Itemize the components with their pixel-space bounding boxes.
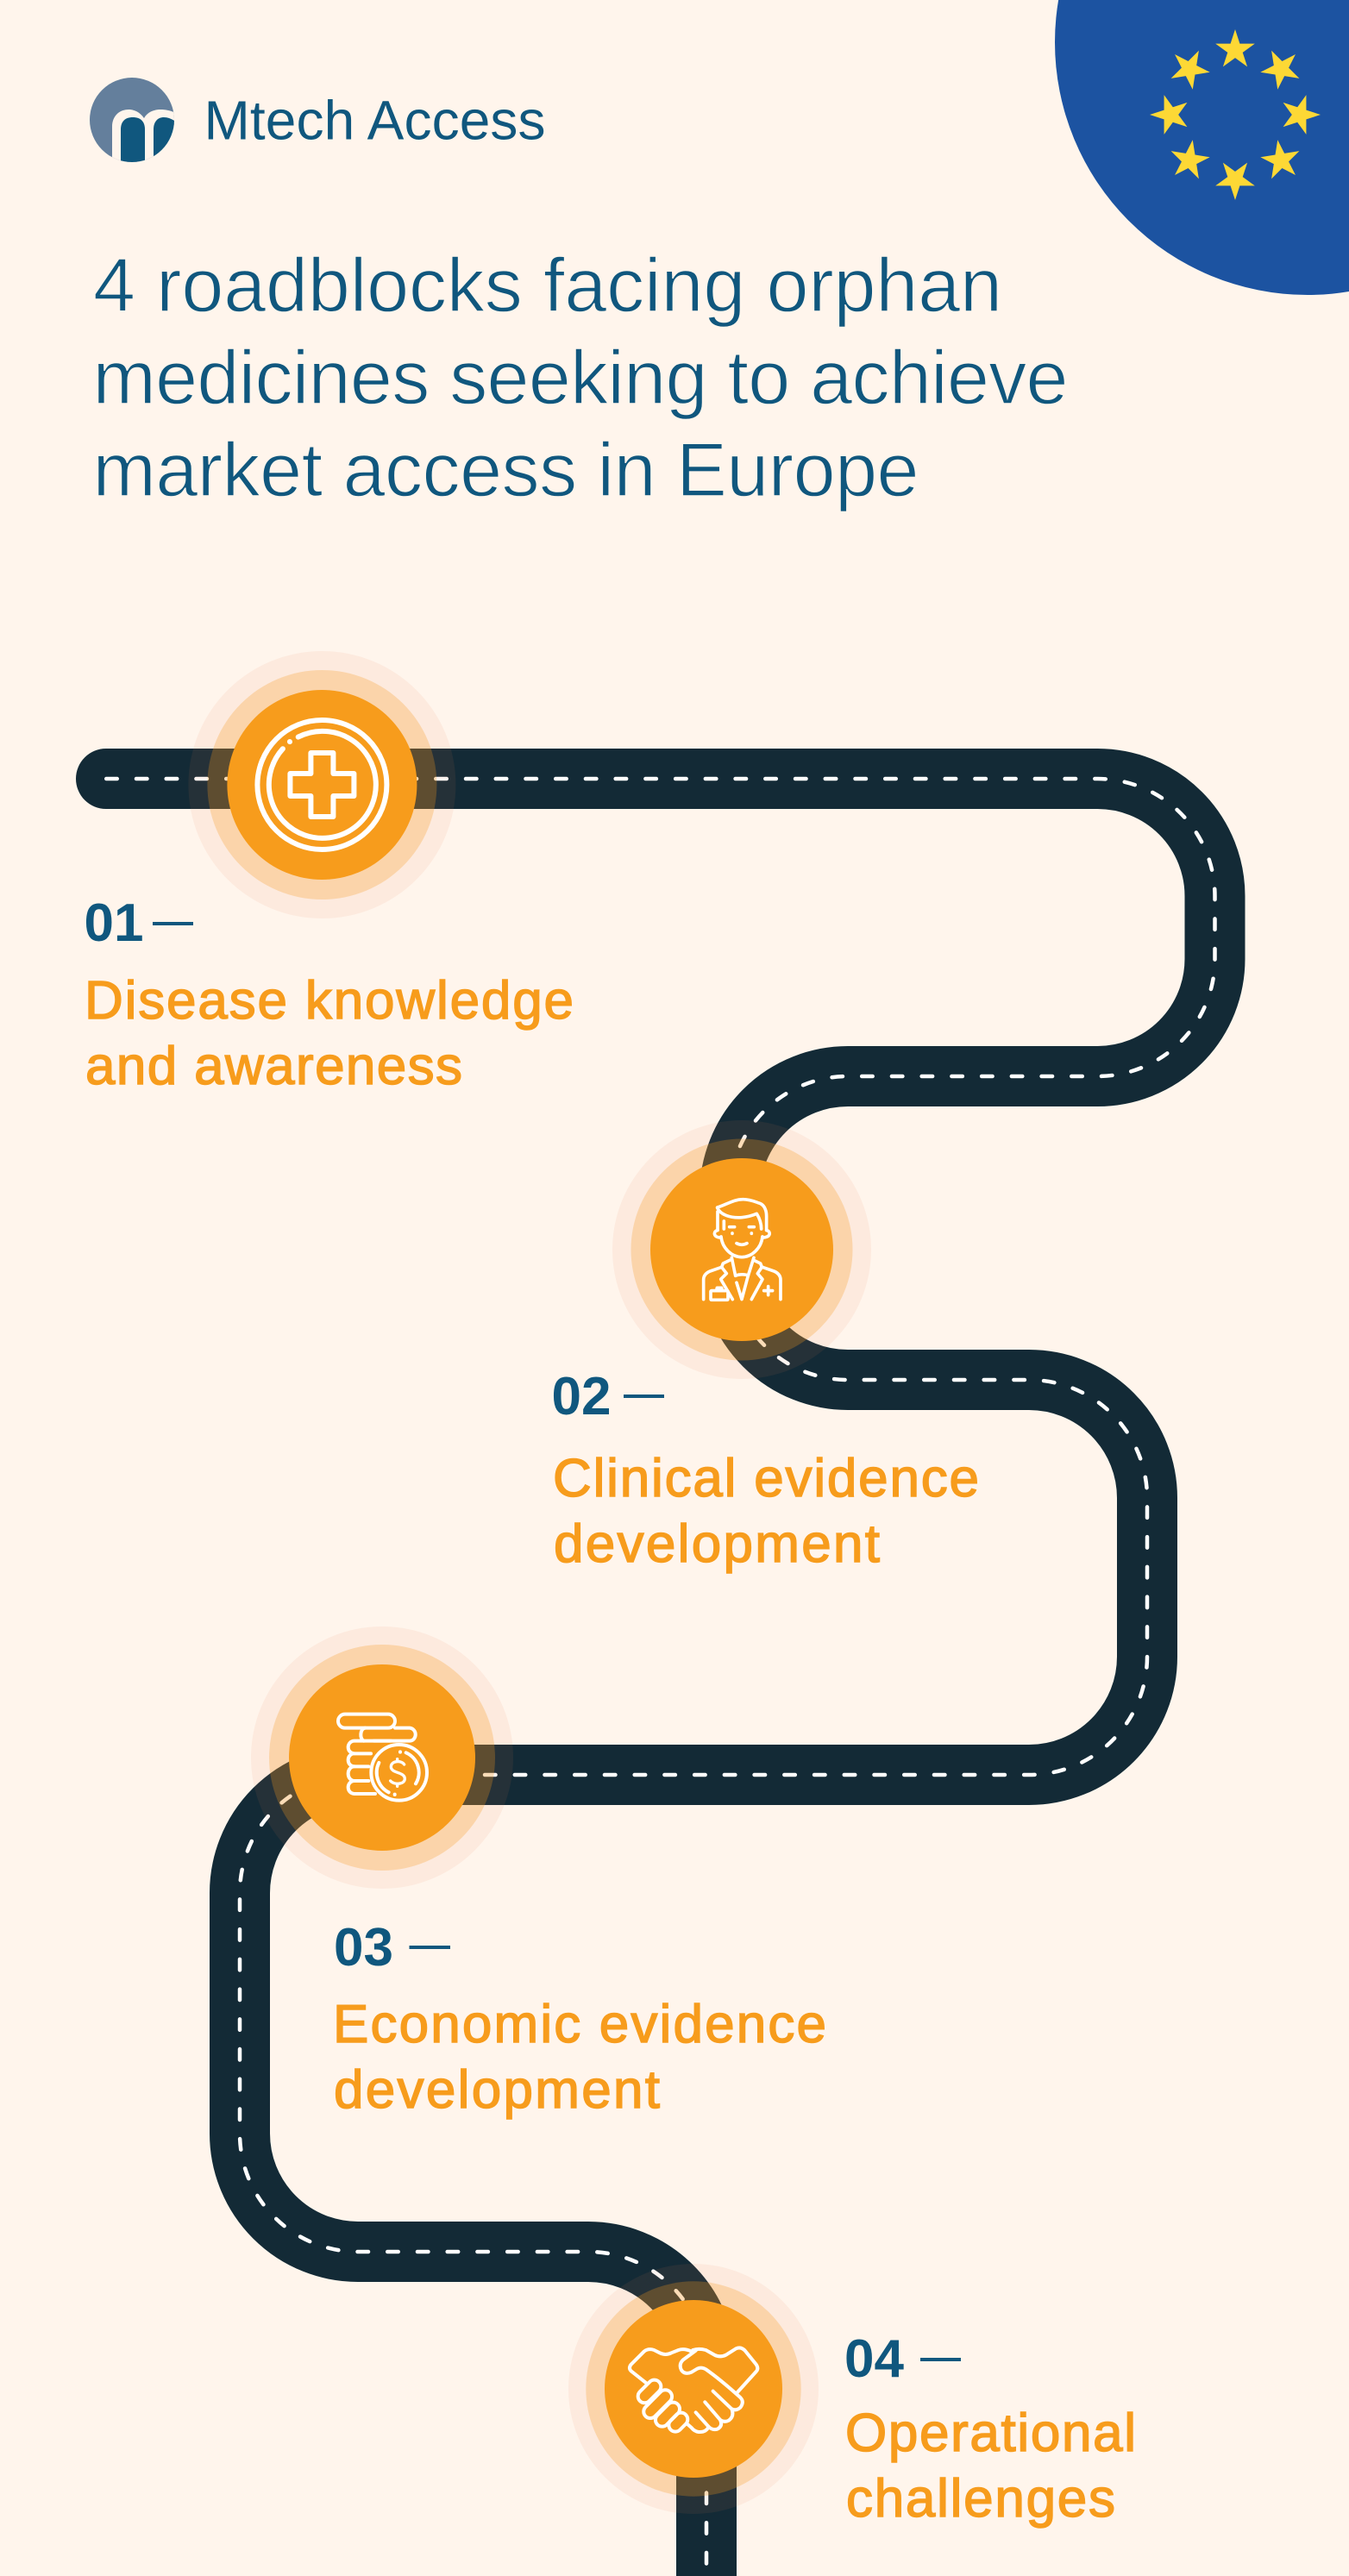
- icon: doctor: [704, 1200, 781, 1300]
- step title: challenges: [846, 2469, 1115, 2529]
- number dash: [624, 1395, 664, 1398]
- icon: handshake: [630, 2347, 757, 2435]
- road: [106, 779, 1214, 2576]
- step title: Disease knowledge: [85, 971, 574, 1031]
- number dash: [153, 922, 193, 925]
- marker 01: medical cross: [188, 651, 455, 918]
- logo mark: [90, 78, 174, 162]
- title: 4 roadblocks facing orphan: [93, 242, 1002, 328]
- logo: [86, 74, 545, 166]
- step title: [845, 2404, 1136, 2529]
- logo wordmark: Mtech Access: [204, 90, 545, 152]
- step title: and awareness: [85, 1037, 462, 1096]
- step title: [553, 1449, 979, 1574]
- title: market access in Europe: [93, 427, 919, 512]
- number dash: [920, 2358, 961, 2361]
- step title: [333, 1995, 826, 2120]
- step number: 01: [85, 893, 143, 953]
- label 04: [844, 2329, 1136, 2529]
- icon: coin stack with dollar: [338, 1714, 427, 1801]
- step title: Clinical evidence: [553, 1449, 979, 1508]
- ring of gold stars: [1150, 29, 1321, 200]
- step title: Economic evidence: [333, 1995, 826, 2054]
- title: medicines seeking to achieve: [93, 335, 1068, 420]
- step title: Operational: [845, 2404, 1136, 2463]
- blue circle: [1055, 0, 1349, 295]
- step title: [85, 971, 574, 1096]
- label 02: [552, 1367, 979, 1574]
- road centre dashes: [106, 779, 1214, 2576]
- step number: 04: [844, 2329, 904, 2389]
- step title: development: [554, 1514, 880, 1574]
- marker 03: coins: [251, 1626, 513, 1889]
- step title: development: [334, 2060, 660, 2120]
- title: [93, 242, 1068, 512]
- label 03: [333, 1918, 826, 2120]
- marker 02: doctor: [612, 1120, 871, 1379]
- step number: 03: [334, 1918, 393, 1977]
- step number: 02: [552, 1367, 611, 1426]
- EU flag corner badge: [1055, 0, 1349, 295]
- label 01: [85, 893, 574, 1096]
- marker 04: handshake: [568, 2264, 819, 2514]
- road surface: [106, 779, 1214, 2576]
- number dash: [409, 1946, 450, 1949]
- icon: medical cross: [257, 720, 386, 849]
